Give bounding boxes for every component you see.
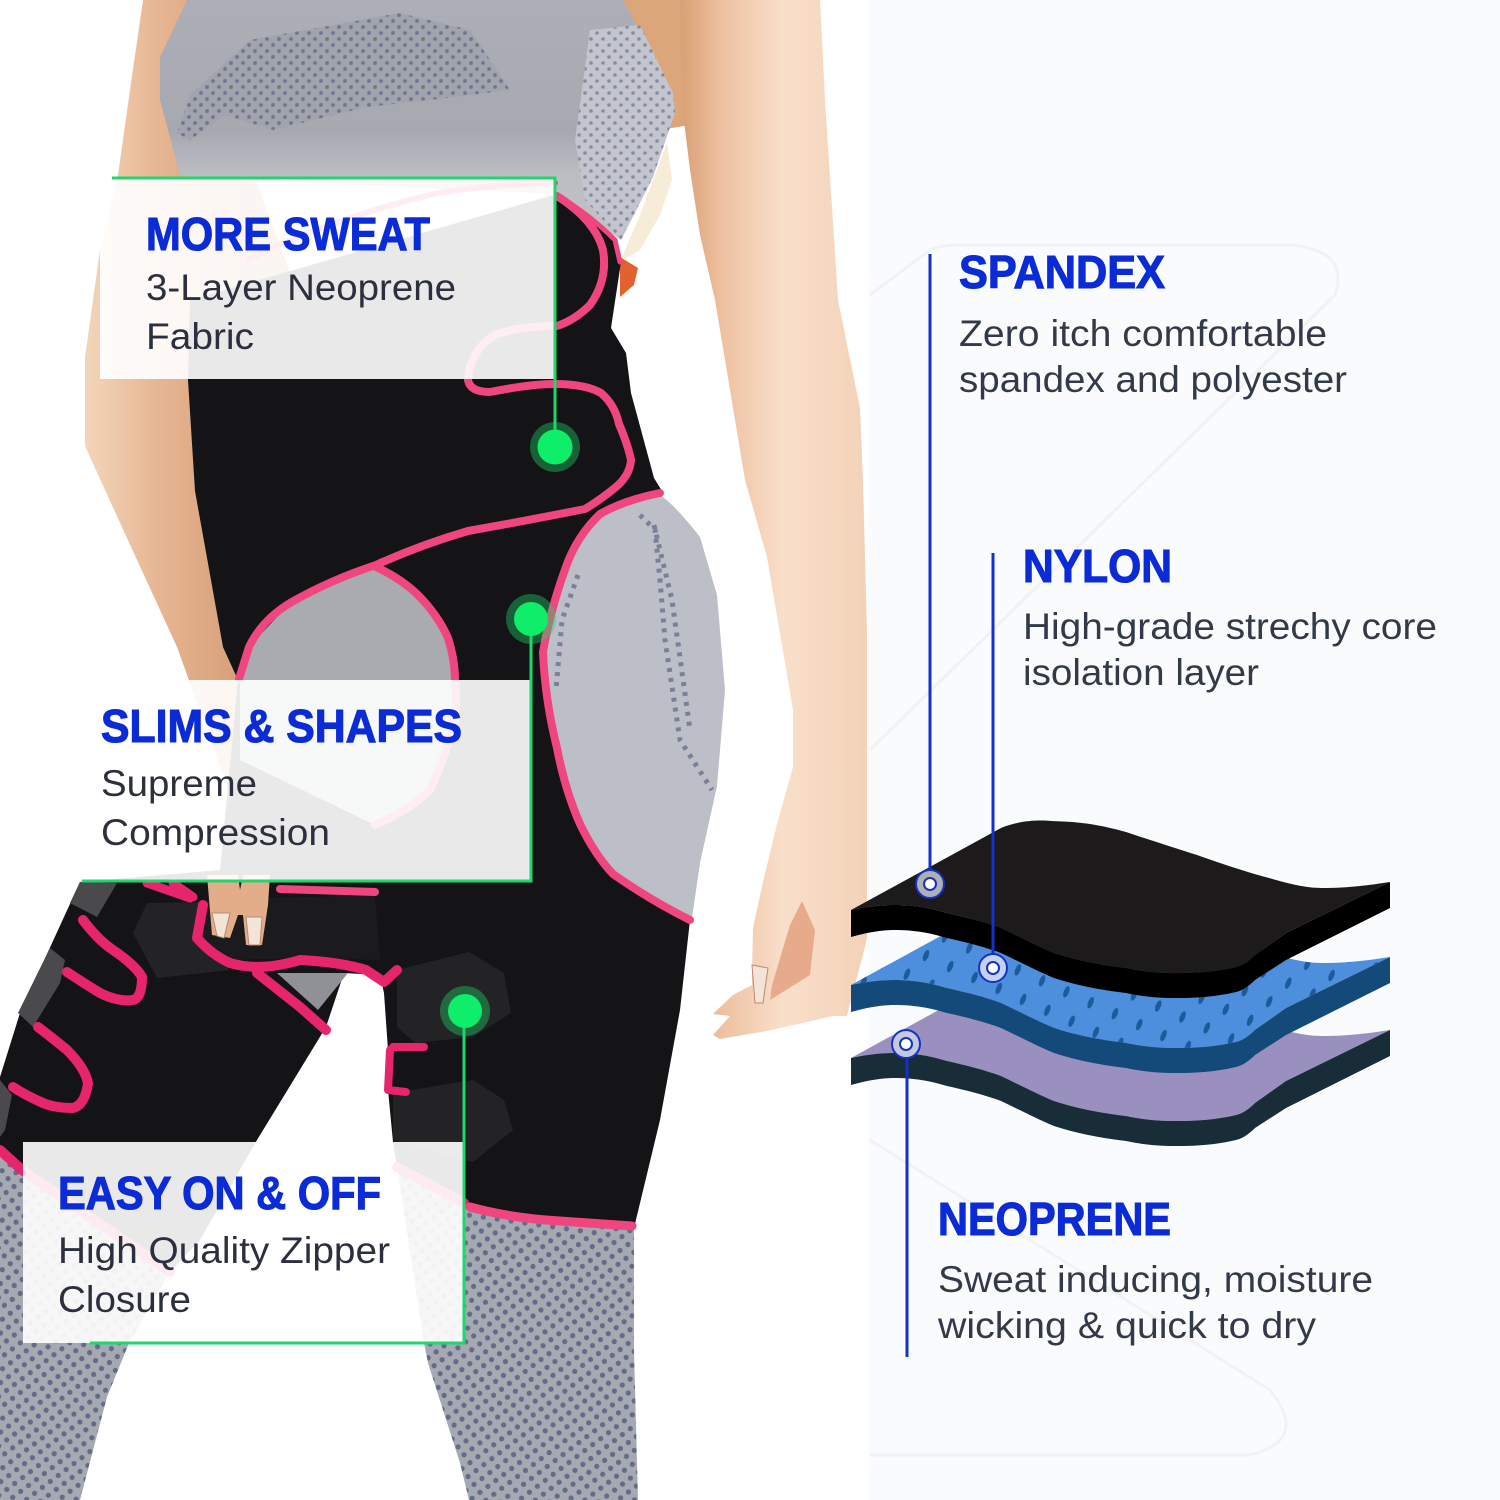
callout: spandex xyxy=(916,246,1347,898)
tank top xyxy=(160,0,675,240)
armpit skin xyxy=(623,0,690,130)
side dot pattern xyxy=(575,25,675,240)
heading: SPANDEX xyxy=(959,246,1165,298)
grey inner thigh xyxy=(240,567,460,825)
heading: NYLON xyxy=(1023,540,1172,592)
description: wicking & quick to dry xyxy=(937,1305,1317,1346)
connector line xyxy=(112,178,555,447)
heading: MORE SWEAT xyxy=(146,208,430,260)
panel: slims and shapes xyxy=(82,594,556,881)
callout: nylon xyxy=(979,540,1437,982)
hotspot xyxy=(506,594,556,644)
grey hip xyxy=(543,495,725,918)
black garment xyxy=(0,194,690,1272)
leader line xyxy=(906,1056,908,1357)
description: 3-Layer Neoprene xyxy=(146,267,456,308)
layer: nylon xyxy=(851,896,1390,1073)
heading: SLIMS & SHAPES xyxy=(101,700,462,752)
description: spandex and polyester xyxy=(959,359,1347,400)
panel: more sweat xyxy=(100,178,580,472)
leader line xyxy=(928,254,932,872)
heading: NEOPRENE xyxy=(938,1193,1171,1245)
person photo xyxy=(0,0,867,1500)
velcro patches and straps xyxy=(0,882,513,1162)
description: Supreme xyxy=(101,763,257,804)
hotspot xyxy=(440,986,490,1036)
marker xyxy=(916,870,944,898)
description: High Quality Zipper xyxy=(58,1230,390,1271)
description: isolation layer xyxy=(1023,652,1259,693)
description: High-grade strechy core xyxy=(1023,606,1437,647)
description: Compression xyxy=(101,812,330,853)
nails xyxy=(212,913,768,1003)
right legging xyxy=(397,1167,638,1500)
description: Sweat inducing, moisture xyxy=(938,1259,1373,1300)
callout: neoprene xyxy=(892,1030,1373,1357)
layer: neoprene xyxy=(851,969,1390,1146)
grey lower inner thigh xyxy=(277,973,348,1010)
description: Fabric xyxy=(146,316,254,357)
connector line xyxy=(90,1012,464,1343)
description: Zero itch comfortable xyxy=(959,313,1327,354)
hip dot columns xyxy=(556,515,712,790)
panel: easy on and off xyxy=(23,986,490,1343)
description: Closure xyxy=(58,1279,191,1320)
marker xyxy=(979,954,1007,982)
hotspot xyxy=(530,422,580,472)
left arm xyxy=(85,0,300,890)
pink binding xyxy=(0,183,690,1272)
heading: EASY ON & OFF xyxy=(58,1167,381,1219)
fabric layers diagram xyxy=(851,821,1390,1146)
marker xyxy=(892,1030,920,1058)
hair strand xyxy=(620,143,672,262)
chest dot pattern xyxy=(177,13,510,140)
garment back tab xyxy=(620,257,638,297)
right arm and hand xyxy=(680,0,867,1039)
layer: spandex xyxy=(851,821,1390,998)
leader line xyxy=(992,553,994,955)
left legging xyxy=(0,1150,170,1500)
connector line xyxy=(82,619,531,881)
lower hand fingers xyxy=(207,875,270,945)
hand finger shadow xyxy=(770,901,815,1000)
